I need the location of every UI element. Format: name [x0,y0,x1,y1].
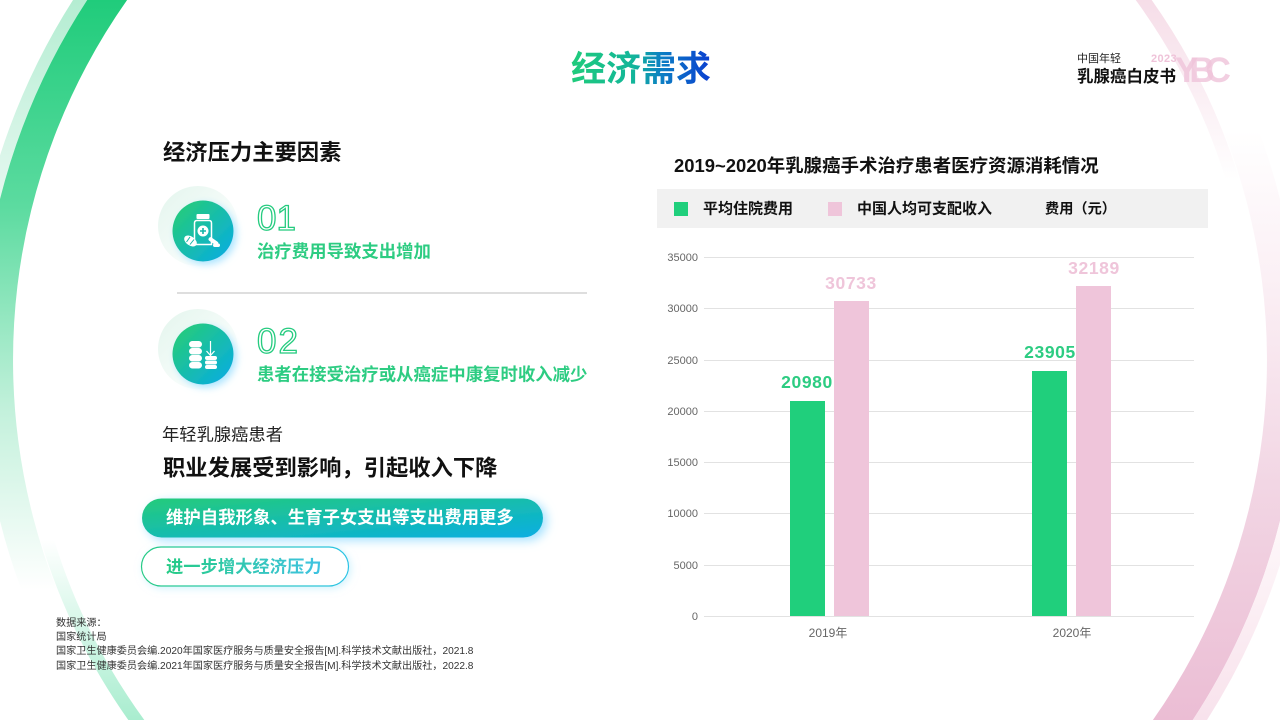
legend bar: 平均住院费用 [703,200,793,218]
legend bar: 中国人均可支配收入 [857,200,992,218]
bars 2019: 30733 [825,273,877,293]
data sources footnote: 数据来源： [56,616,107,629]
y axis labels: 0 [692,611,698,623]
data sources footnote: 国家卫生健康委员会编.2021年国家医疗服务与质量安全报告[M].科学技术文献出版社，2022.8 [56,659,474,672]
y axis labels: 15000 [667,457,698,469]
y axis labels: 25000 [667,355,698,367]
title: 经济需求 [571,50,711,89]
chart title: 2019~2020年乳腺癌手术治疗患者医疗资源消耗情况 [674,155,1099,176]
number 01: 01 [257,199,296,238]
legend bar: 费用（元） [1045,202,1116,218]
callout: increased pressure: 进一步增大经济压力 [166,556,322,576]
callout: additional expenses [142,498,543,538]
data sources footnote [56,616,474,672]
bar chart [667,252,1194,640]
y axis labels: 20000 [667,406,698,418]
logo: 2023 YBC white paper: 2023 [1151,53,1177,65]
factor 01 [158,186,431,266]
data sources footnote: 国家卫生健康委员会编.2020年国家医疗服务与质量安全报告[M].科学技术文献出版社，2021.8 [56,644,474,657]
y axis labels: 5000 [674,560,698,572]
legend bar [657,189,1208,228]
x axis labels: 2020年 [1053,626,1091,640]
text: income reduction: 患者在接受治疗或从癌症中康复时收入减少 [257,364,587,384]
logo: 2023 YBC white paper: 中国年轻 [1077,51,1121,65]
logo: 2023 YBC white paper: YBC [1175,51,1231,90]
text: career impact: 职业发展受到影响，引起收入下降 [163,456,497,480]
logo: 2023 YBC white paper [1077,51,1231,90]
green arc decoration [0,0,144,720]
x axis labels [809,626,1091,640]
x axis labels: 2019年 [809,626,847,640]
pink arc decoration [1136,0,1280,720]
text: young patients: 年轻乳腺癌患者 [162,424,283,444]
number 02: 02 [257,322,300,361]
callout: increased pressure [142,547,348,586]
y axis labels: 10000 [667,508,698,520]
bars 2020: 23905 [1024,342,1076,362]
logo: 2023 YBC white paper: 乳腺癌白皮书 [1077,66,1176,86]
panel: economic pressure factors [142,140,587,586]
data sources footnote: 国家统计局 [56,630,107,643]
y axis labels [667,252,698,623]
heading: factors: 经济压力主要因素 [163,140,341,165]
y axis labels: 30000 [667,303,698,315]
icon: medicine bottle and pills [158,186,238,266]
bars 2019: 20980 [781,372,833,392]
bars 2019 [781,273,877,616]
y axis labels: 35000 [667,252,698,264]
factor 02 [158,309,587,389]
bars 2020: 32189 [1068,258,1120,278]
icon: coins with down arrow [158,309,238,389]
text: treatment costs: 治疗费用导致支出增加 [257,242,431,262]
bars 2020 [1024,258,1120,616]
callout: additional expenses: 维护自我形象、生育子女支出等支出费用更多 [166,508,514,528]
